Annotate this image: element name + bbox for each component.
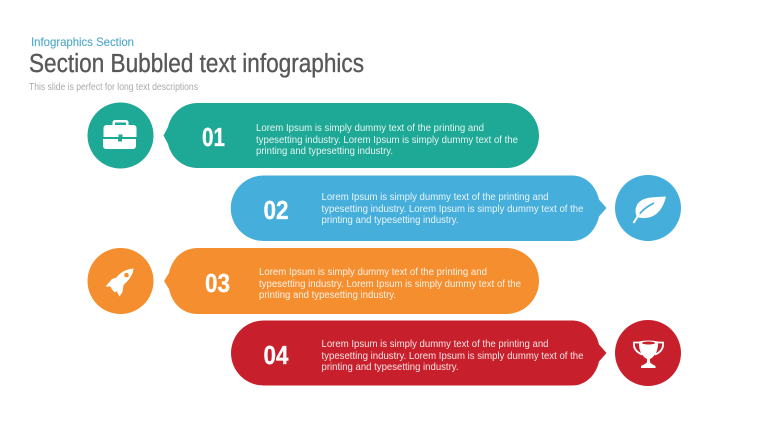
text block xyxy=(322,339,584,373)
icon: leaf xyxy=(615,175,681,241)
text block: Lorem Ipsum is simply dummy text of the printing and xyxy=(256,123,484,134)
text block xyxy=(259,267,521,301)
icon: trophy xyxy=(615,320,681,386)
text block: typesetting industry. Lorem Ipsum is simply dummy text of the xyxy=(322,204,584,215)
icon: briefcase xyxy=(88,102,154,168)
text block: typesetting industry. Lorem Ipsum is simply dummy text of the xyxy=(259,279,521,290)
subtitle: This slide is perfect for long text descriptions xyxy=(29,82,198,93)
number: 04 xyxy=(264,340,289,370)
bubble xyxy=(231,320,607,386)
text block: typesetting industry. Lorem Ipsum is simply dummy text of the xyxy=(322,351,584,362)
text block: Lorem Ipsum is simply dummy text of the printing and xyxy=(322,339,549,350)
eyebrow heading: Infographics Section xyxy=(31,35,134,49)
bubble xyxy=(164,248,539,314)
text block: printing and typesetting industry. xyxy=(256,146,393,157)
row 3: orange bubble xyxy=(88,248,539,314)
text block xyxy=(322,192,584,226)
bubble xyxy=(164,103,539,168)
title: Section Bubbled text infographics xyxy=(29,50,364,78)
number: 01 xyxy=(202,122,225,152)
text block: typesetting industry. Lorem Ipsum is simply dummy text of the xyxy=(256,135,518,146)
text block: printing and typesetting industry. xyxy=(322,215,458,226)
bubble xyxy=(231,176,606,241)
icon: rocket xyxy=(88,248,154,314)
text block: printing and typesetting industry. xyxy=(322,362,458,373)
row 2: blue bubble xyxy=(231,175,681,241)
number: 02 xyxy=(264,195,288,225)
text block: Lorem Ipsum is simply dummy text of the printing and xyxy=(322,192,549,203)
row 1: teal bubble xyxy=(88,102,539,168)
row 4: red bubble xyxy=(231,320,681,386)
text block: Lorem Ipsum is simply dummy text of the printing and xyxy=(259,267,487,278)
number: 03 xyxy=(205,268,230,298)
text block: printing and typesetting industry. xyxy=(259,290,396,301)
text block xyxy=(256,123,518,157)
